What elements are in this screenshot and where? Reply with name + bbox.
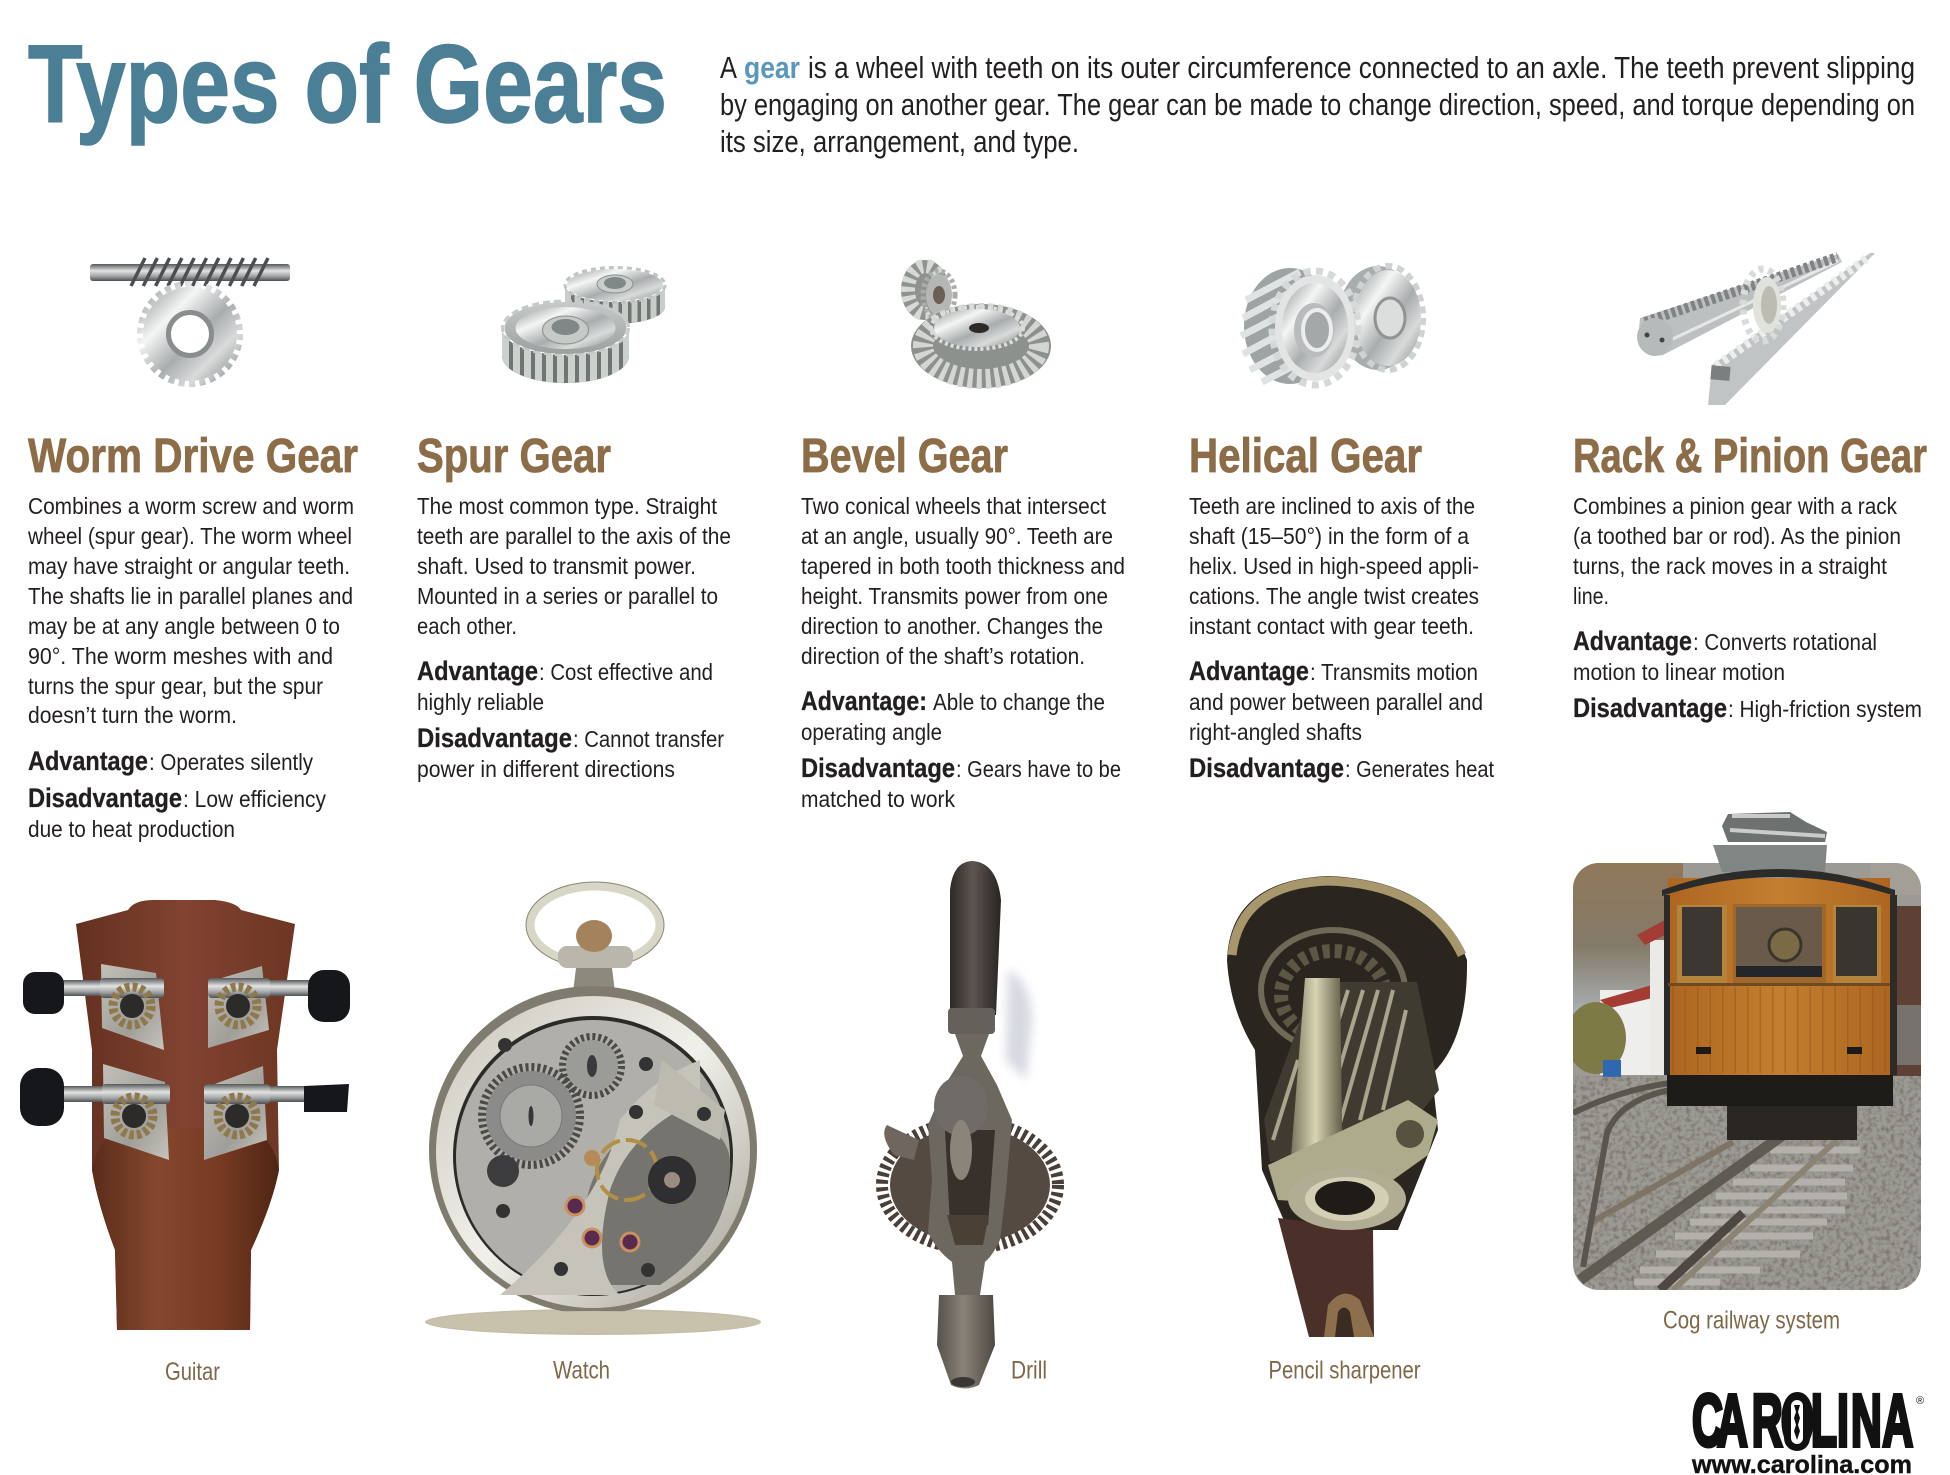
photo: cog railway train — [1566, 812, 1921, 1290]
heading: helical gear: Helical Gear — [1189, 430, 1422, 483]
advantage: worm drive gear: Advantage — [28, 746, 148, 776]
disadvantage: spur gear: Disadvantage — [417, 723, 572, 753]
description: helical gear: Teeth are inclined to axis of the — [1189, 493, 1475, 519]
description: bevel gear: Two conical wheels that intersect — [801, 493, 1106, 519]
description: worm drive gear: may have straight or angular teeth. — [28, 553, 350, 579]
description: rack and pinion gear — [1573, 493, 1901, 609]
logo: Carolina: ® — [1916, 1395, 1924, 1407]
description: worm drive gear: The shafts lie in parallel planes and — [28, 583, 353, 609]
description: rack and pinion gear: turns, the rack moves in a straight — [1573, 553, 1887, 579]
disadvantage: rack and pinion gear: Disadvantage — [1573, 693, 1727, 723]
icon: rack and pinion — [1637, 253, 1875, 405]
description: helical gear: cations. The angle twist creates — [1189, 583, 1479, 609]
advantage: worm drive gear — [28, 746, 313, 776]
advantage: spur gear: Advantage — [417, 656, 538, 686]
description: helical gear: instant contact with gear teeth. — [1189, 613, 1474, 639]
advantage: bevel gear: Advantage: — [801, 686, 927, 716]
icon: helical gears — [1241, 266, 1423, 385]
caption: guitar: Guitar — [165, 1358, 220, 1386]
description: bevel gear: direction to another. Changes the — [801, 613, 1103, 639]
advantage: rack and pinion gear: Advantage — [1573, 626, 1692, 656]
description: bevel gear — [801, 493, 1125, 669]
advantage: spur gear: highly reliable — [417, 689, 544, 715]
disadvantage: bevel gear: matched to work — [801, 786, 955, 812]
advantage: spur gear — [417, 656, 713, 715]
caption: cog railway system: Cog railway system — [1663, 1306, 1840, 1334]
disadvantage: worm drive gear — [28, 783, 326, 842]
description: worm drive gear: may be at any angle between 0 to — [28, 613, 340, 639]
advantage: bevel gear — [801, 686, 1105, 745]
description: bevel gear: height. Transmits power from one — [801, 583, 1108, 609]
photo: pencil sharpener — [1227, 876, 1467, 1337]
advantage: helical gear: right-angled shafts — [1189, 719, 1362, 745]
advantage: bevel gear: Able to change the — [933, 689, 1105, 715]
panel: rack and pinion gear — [1566, 253, 1927, 1334]
caption: drill: Drill — [1011, 1356, 1047, 1384]
heading: bevel gear: Bevel Gear — [801, 430, 1008, 483]
advantage: rack and pinion gear: motion to linear motion — [1573, 659, 1785, 685]
advantage: helical gear: Advantage — [1189, 656, 1309, 686]
disadvantage: worm drive gear: Disadvantage — [28, 783, 182, 813]
heading: spur gear: Spur Gear — [417, 430, 611, 483]
disadvantage: spur gear — [417, 723, 724, 782]
disadvantage: helical gear: Disadvantage — [1189, 753, 1344, 783]
description: helical gear: shaft (15–50°) in the form of a — [1189, 523, 1470, 549]
description: spur gear: The most common type. Straight — [417, 493, 717, 519]
description: worm drive gear: wheel (spur gear). The worm wheel — [27, 523, 352, 549]
disadvantage: bevel gear: : Gears have to be — [956, 756, 1121, 782]
disadvantage: spur gear: power in different directions — [417, 756, 675, 782]
advantage: spur gear: : Cost effective and — [539, 659, 713, 685]
photo: guitar headstock — [20, 900, 350, 1330]
advantage: rack and pinion gear: : Converts rotational — [1693, 629, 1877, 655]
description: worm drive gear: 90°. The worm meshes with and — [28, 643, 333, 669]
disadvantage: helical gear: : Generates heat — [1345, 756, 1494, 782]
icon: worm drive gear — [90, 258, 290, 384]
description: rack and pinion gear: (a toothed bar or rod). As the pinion — [1573, 523, 1901, 549]
description: bevel gear: tapered in both tooth thickness and — [801, 553, 1125, 579]
disadvantage: rack and pinion gear: : High-friction system — [1728, 696, 1922, 722]
description: spur gear: teeth are parallel to the axis of the — [417, 523, 731, 549]
description: spur gear: each other. — [417, 613, 517, 639]
description: worm drive gear: Combines a worm screw and worm — [28, 493, 354, 519]
description: worm drive gear: turns the spur gear, but the spur — [28, 673, 323, 699]
disadvantage: rack and pinion gear — [1573, 693, 1922, 723]
description: spur gear: Mounted in a series or parallel to — [417, 583, 718, 609]
panel: bevel gear — [801, 260, 1125, 1388]
disadvantage: spur gear: : Cannot transfer — [573, 726, 724, 752]
description: helical gear: helix. Used in high-speed appli- — [1189, 553, 1479, 579]
disadvantage: bevel gear — [801, 753, 1121, 812]
title: Types of Gears — [28, 23, 667, 146]
advantage: bevel gear: operating angle — [801, 719, 942, 745]
panel: worm drive gear — [20, 258, 358, 1386]
advantage: helical gear — [1189, 656, 1483, 745]
panel: spur gear — [417, 268, 761, 1384]
description: worm drive gear — [27, 493, 354, 728]
disadvantage: worm drive gear: due to heat production — [28, 816, 235, 842]
caption: watch: Watch — [553, 1356, 610, 1384]
description: bevel gear: at an angle, usually 90°. Teeth are — [801, 523, 1113, 549]
intro paragraph: its size, arrangement, and type. — [720, 124, 1079, 159]
description: worm drive gear: doesn’t turn the worm. — [28, 702, 237, 728]
caption: pencil sharpener: Pencil sharpener — [1268, 1356, 1420, 1384]
panel: helical gear — [1189, 266, 1494, 1384]
description: spur gear — [417, 493, 731, 639]
description: rack and pinion gear: line. — [1573, 583, 1609, 609]
disadvantage: worm drive gear: : Low efficiency — [183, 786, 326, 812]
disadvantage: helical gear — [1189, 753, 1494, 783]
intro paragraph — [720, 50, 1915, 159]
advantage: worm drive gear: : Operates silently — [149, 749, 313, 775]
intro paragraph: A — [720, 50, 737, 85]
intro paragraph: gear — [744, 50, 800, 85]
icon: bevel gears — [901, 260, 1051, 388]
description: bevel gear: direction of the shaft’s rotation. — [801, 643, 1085, 669]
icon: spur gears — [502, 268, 665, 388]
logo: Carolina: CAROLINA — [1692, 1379, 1913, 1462]
disadvantage: bevel gear: Disadvantage — [801, 753, 955, 783]
advantage: helical gear: : Transmits motion — [1310, 659, 1478, 685]
advantage: rack and pinion gear — [1573, 626, 1877, 685]
description: helical gear — [1189, 493, 1479, 639]
description: spur gear: shaft. Used to transmit power. — [417, 553, 696, 579]
heading: worm drive gear: Worm Drive Gear — [28, 430, 358, 483]
photo: hand drill — [882, 861, 1058, 1388]
description: rack and pinion gear: Combines a pinion gear with a rack — [1573, 493, 1897, 519]
advantage: helical gear: and power between parallel and — [1189, 689, 1483, 715]
photo: pocket watch — [425, 882, 761, 1335]
